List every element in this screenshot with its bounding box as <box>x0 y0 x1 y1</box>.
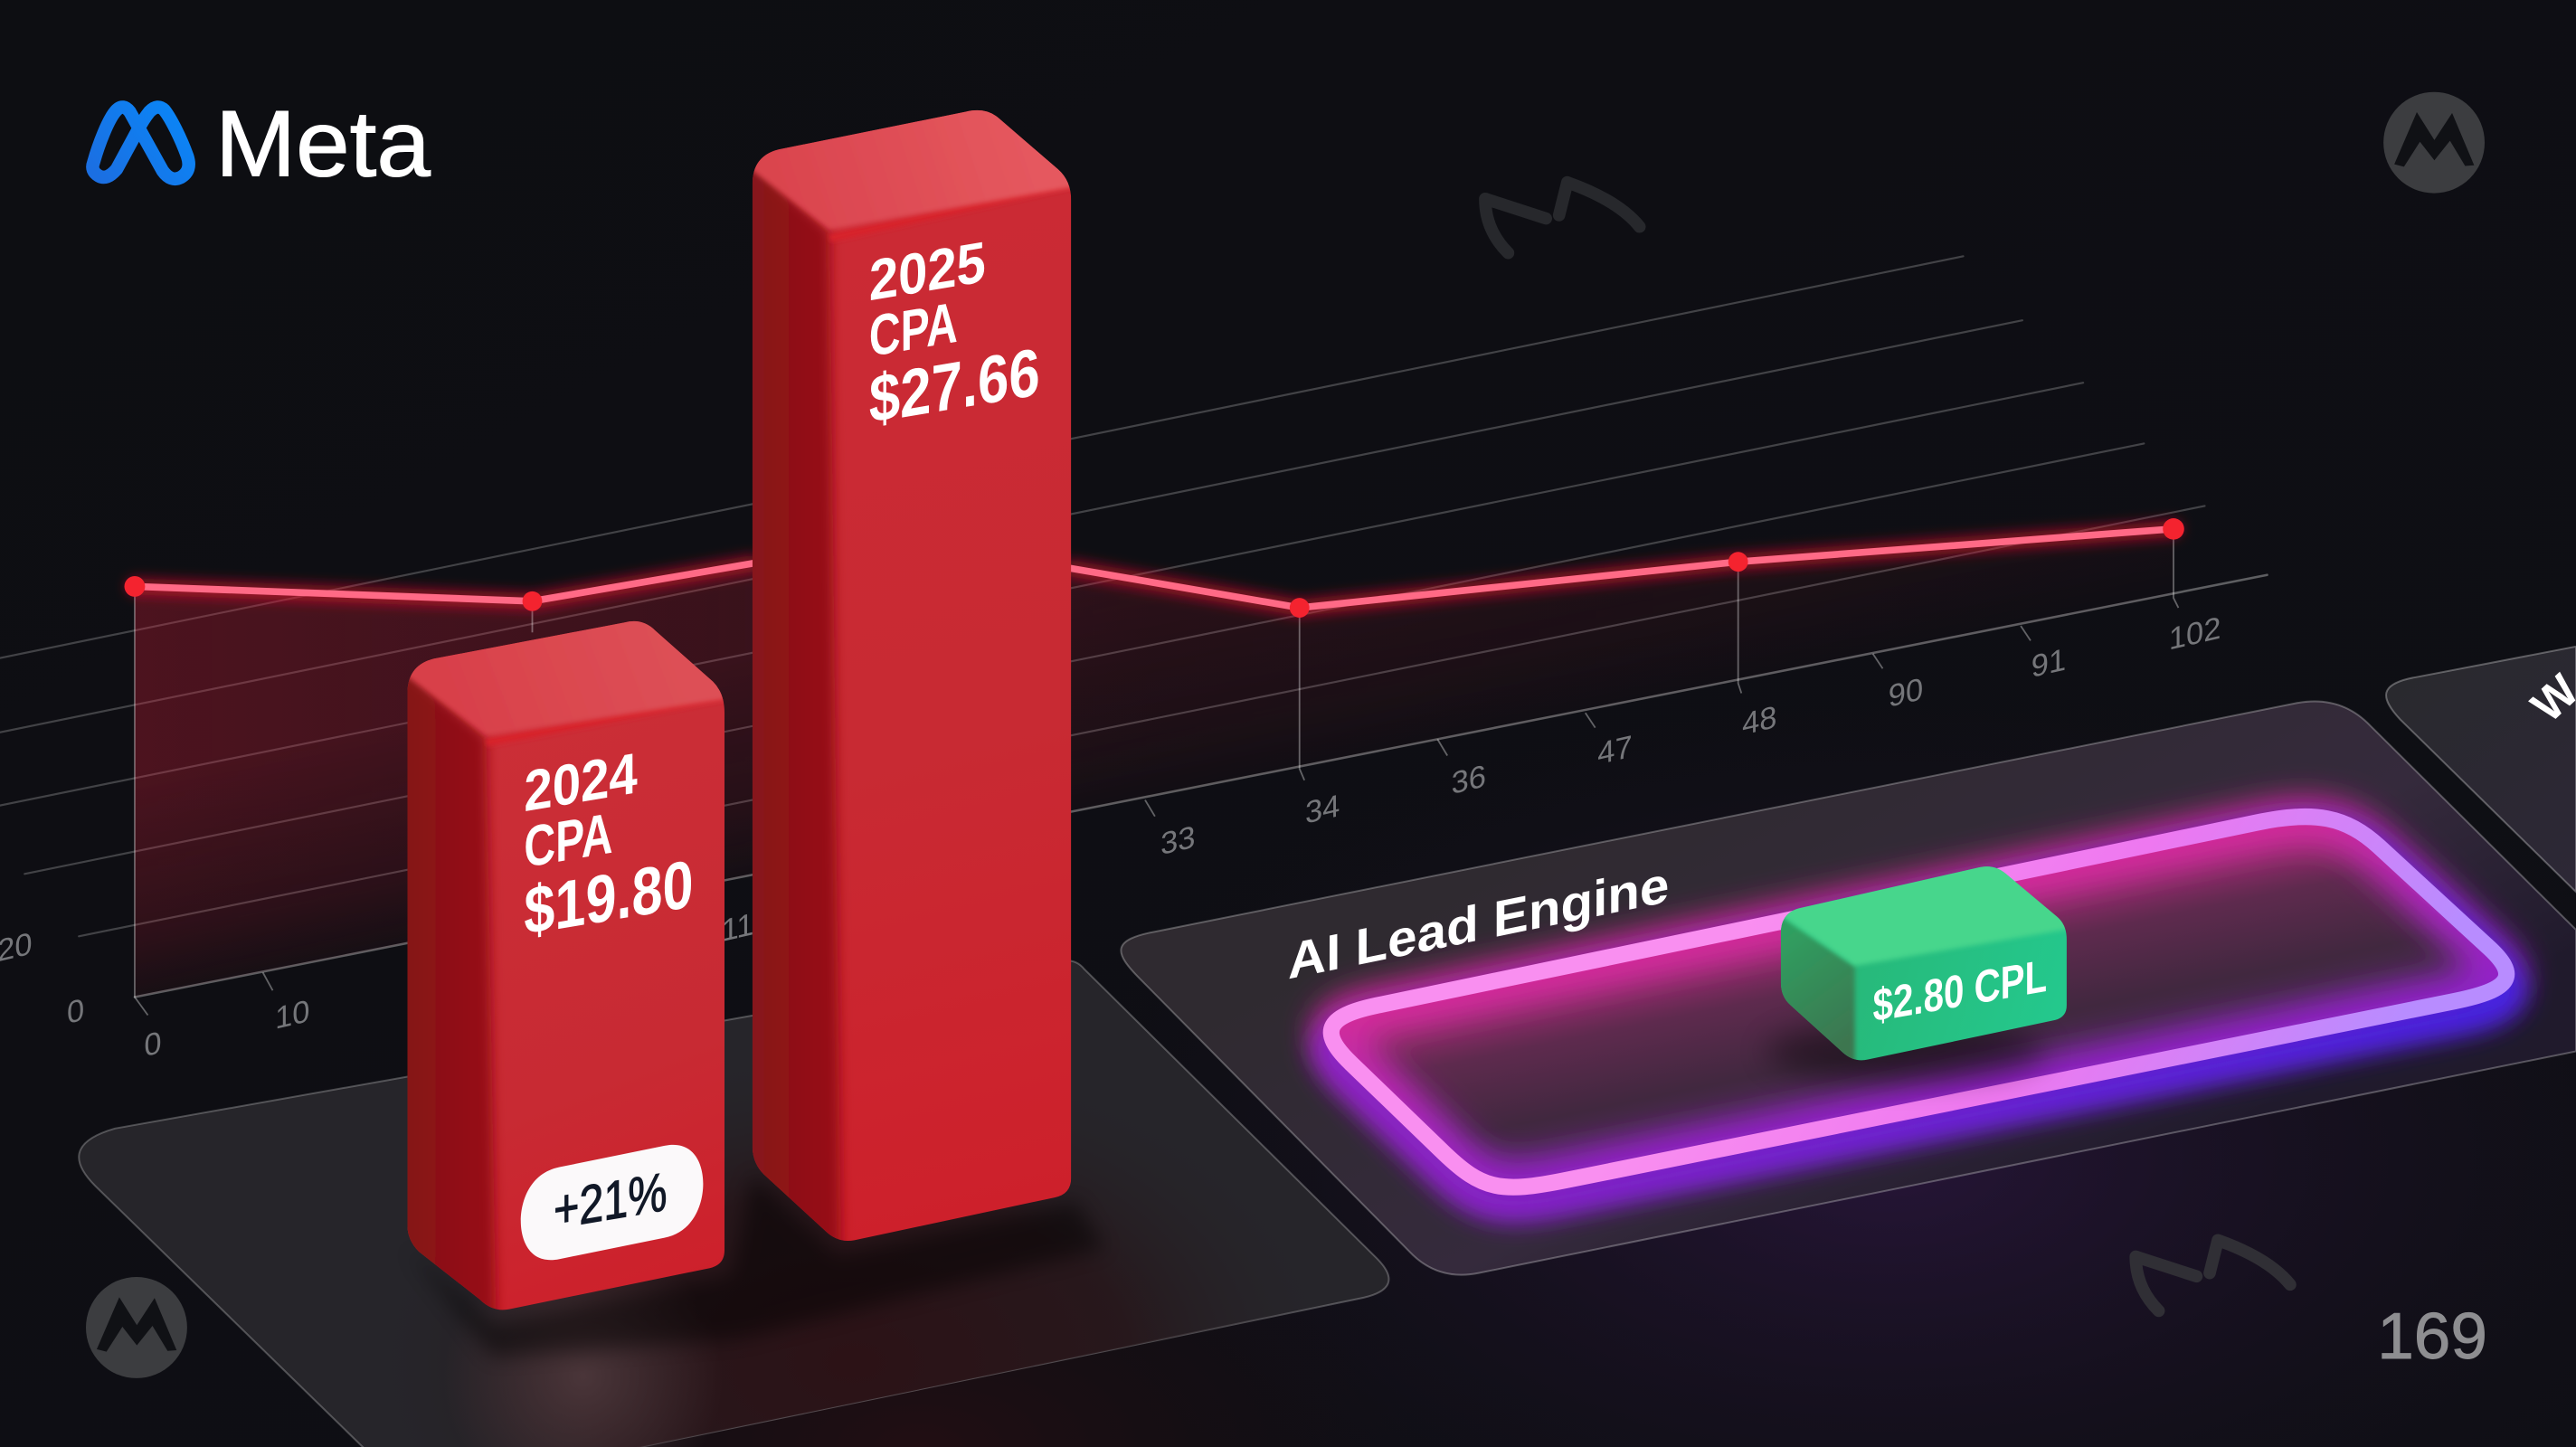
axis labels: 33 <box>1160 819 1195 862</box>
watermark: script M bottom <box>2136 1240 2290 1310</box>
bar label <box>869 229 1040 438</box>
chart: CPA trend line on perspective grid <box>0 256 2268 1064</box>
axis labels: 90 <box>1889 671 1923 714</box>
panel: base platform under bars <box>79 960 1388 1447</box>
panel: partial platform right <box>2386 647 2576 892</box>
watermark: script M top <box>1485 183 1640 253</box>
axis labels: 102 <box>2169 610 2221 657</box>
axis labels: 47 <box>1597 729 1633 771</box>
bar: 2025 CPA <box>753 110 1071 1241</box>
axis labels: 36 <box>1452 759 1486 801</box>
axis labels: 0 <box>144 1025 162 1064</box>
data points <box>124 518 2184 618</box>
axis labels: 10 <box>275 993 309 1036</box>
panel: AI Lead Engine platform <box>1121 701 2576 1275</box>
bar label: CPA <box>869 289 958 369</box>
badge: +21%: +21% <box>554 1160 667 1241</box>
green CPL block <box>1766 851 2083 1081</box>
icon: meta circle badge bottom left <box>86 1277 187 1378</box>
bar label: 2024 <box>524 741 638 824</box>
bar label <box>524 741 693 949</box>
bar label: $27.66 <box>869 334 1040 438</box>
icon: meta circle badge top right <box>2383 92 2485 194</box>
bar: 2024 CPA <box>407 620 724 1310</box>
icon: meta infinity mark <box>92 107 189 179</box>
bar label: CPA <box>524 800 612 880</box>
axis labels: 34 <box>1305 788 1340 831</box>
logo wordmark: Meta <box>215 90 431 195</box>
red trend line <box>135 529 2174 608</box>
bar label: 2025 <box>869 229 986 313</box>
axis labels: 0 <box>67 992 84 1031</box>
bar label: $19.80 <box>524 846 693 949</box>
logo: Meta <box>92 90 431 195</box>
neon ring <box>1331 817 2506 1204</box>
heading: AI Lead Engine: AI Lead Engine <box>1288 856 1669 990</box>
axis labels: 11 <box>722 906 753 949</box>
page number: 169 <box>2377 1300 2487 1373</box>
label: $2.80 CPL <box>1873 950 2047 1032</box>
grid lines <box>0 256 2268 998</box>
drop lines and ticks <box>135 529 2178 1015</box>
badge: +21% <box>521 1138 703 1267</box>
axis labels <box>0 610 2221 1064</box>
area under the line <box>135 529 2174 998</box>
axis labels: 91 <box>2031 642 2066 685</box>
axis labels: 48 <box>1742 699 1776 742</box>
